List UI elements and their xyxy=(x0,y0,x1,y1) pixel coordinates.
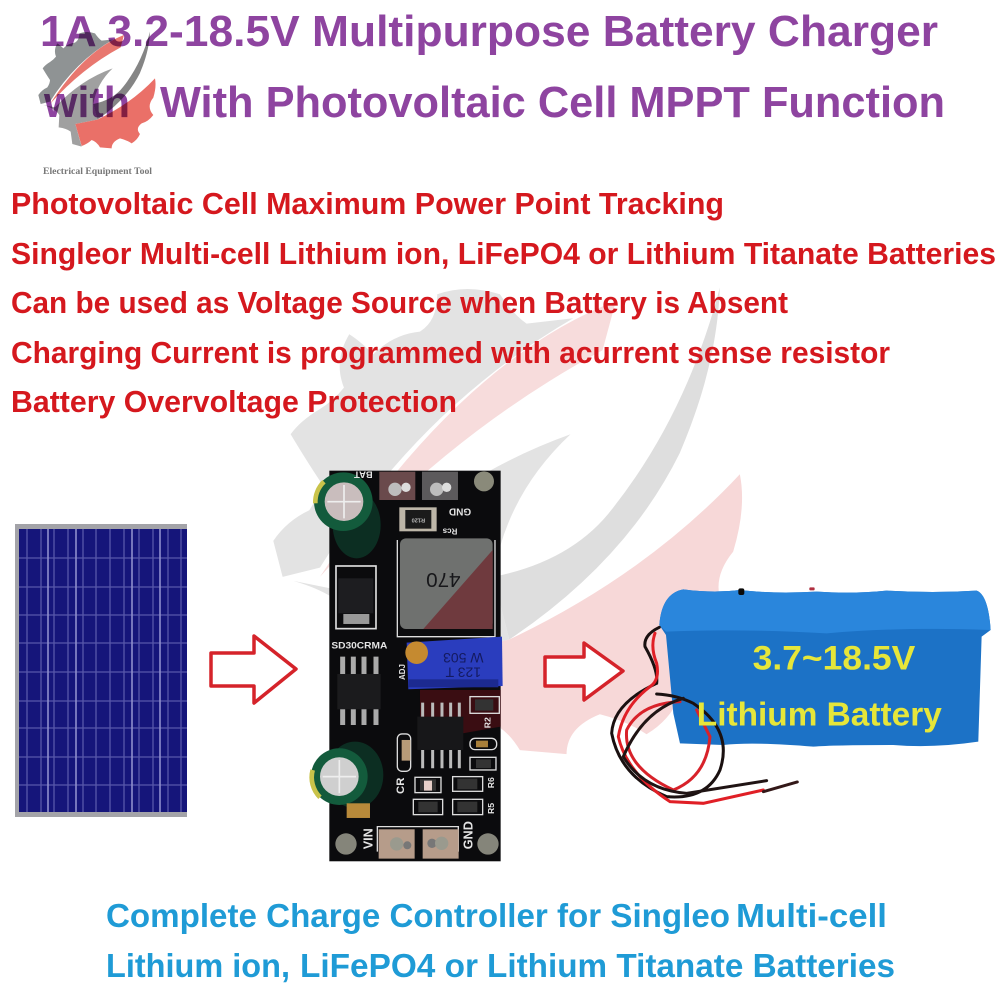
bottom terminals xyxy=(335,827,499,859)
bottom caption xyxy=(106,897,895,984)
trimmer potentiometer: W 503 xyxy=(443,650,484,666)
arrow: board to battery xyxy=(545,643,623,700)
capacitor top xyxy=(314,472,381,558)
feature list: Singleor Multi-cell Lithium ion, LiFePO4 or Lithium Titanate Batteries xyxy=(11,236,996,271)
board labels: BAT xyxy=(354,470,373,480)
bottom caption: Lithium Titanate Batteries xyxy=(487,947,895,984)
charger circuit board xyxy=(311,470,503,861)
small logo xyxy=(38,32,156,148)
capacitor bottom xyxy=(311,742,383,818)
board labels: GND xyxy=(462,821,476,849)
feature list: Battery Overvoltage Protection xyxy=(11,384,457,419)
lead wires xyxy=(612,627,797,803)
bottom caption: Complete Charge Controller for Singleo xyxy=(106,897,730,934)
board labels: SD30CRMA xyxy=(331,641,388,651)
battery labels: Lithium Battery xyxy=(697,696,942,733)
feature list xyxy=(11,186,996,419)
bottom caption: LiFePO4 or xyxy=(300,947,478,984)
feature list: Charging Current is programmed with acurrent sense resistor xyxy=(11,335,890,370)
logo caption: Electrical Equipment Tool xyxy=(43,166,153,176)
board labels: CR xyxy=(395,778,407,794)
inductor xyxy=(397,538,495,637)
board labels: VIN xyxy=(362,828,376,849)
board labels: ADJ xyxy=(398,664,407,680)
solar panel xyxy=(15,524,187,817)
feature list: Can be used as Voltage Source when Battery is Absent xyxy=(11,285,788,320)
board labels: Rcs xyxy=(442,527,457,536)
trimmer potentiometer: 123 T xyxy=(445,664,481,680)
arrow: panel to board xyxy=(211,636,296,703)
title: 1A 3.2-18.5V Multipurpose Battery Charger xyxy=(40,7,938,56)
SMD parts xyxy=(397,697,499,815)
battery labels: 3.7~18.5V xyxy=(753,639,915,677)
board labels: R5 xyxy=(486,803,496,814)
title: With Photovoltaic Cell MPPT Function xyxy=(160,78,945,127)
board labels: R6 xyxy=(486,777,496,788)
battery body xyxy=(659,589,991,747)
feature list: Photovoltaic Cell Maximum Power Point Tracking xyxy=(11,186,724,221)
bottom caption: Multi-cell xyxy=(736,897,887,934)
top terminals xyxy=(379,471,494,500)
battery labels xyxy=(697,639,942,733)
resistor Rcs: R120 xyxy=(412,516,425,522)
diode xyxy=(336,566,376,629)
bottom caption: Lithium ion, xyxy=(106,947,290,984)
SOIC chips xyxy=(337,657,463,768)
title: with xyxy=(43,78,130,127)
inductor: 470 xyxy=(426,568,461,591)
board labels: R2 xyxy=(483,717,493,728)
battery pack xyxy=(612,587,991,803)
board labels xyxy=(331,470,496,849)
watermark logo xyxy=(273,288,742,754)
title xyxy=(40,7,945,127)
resistor Rcs xyxy=(399,507,437,531)
board labels: GND xyxy=(449,505,471,516)
trimmer potentiometer xyxy=(405,637,503,689)
